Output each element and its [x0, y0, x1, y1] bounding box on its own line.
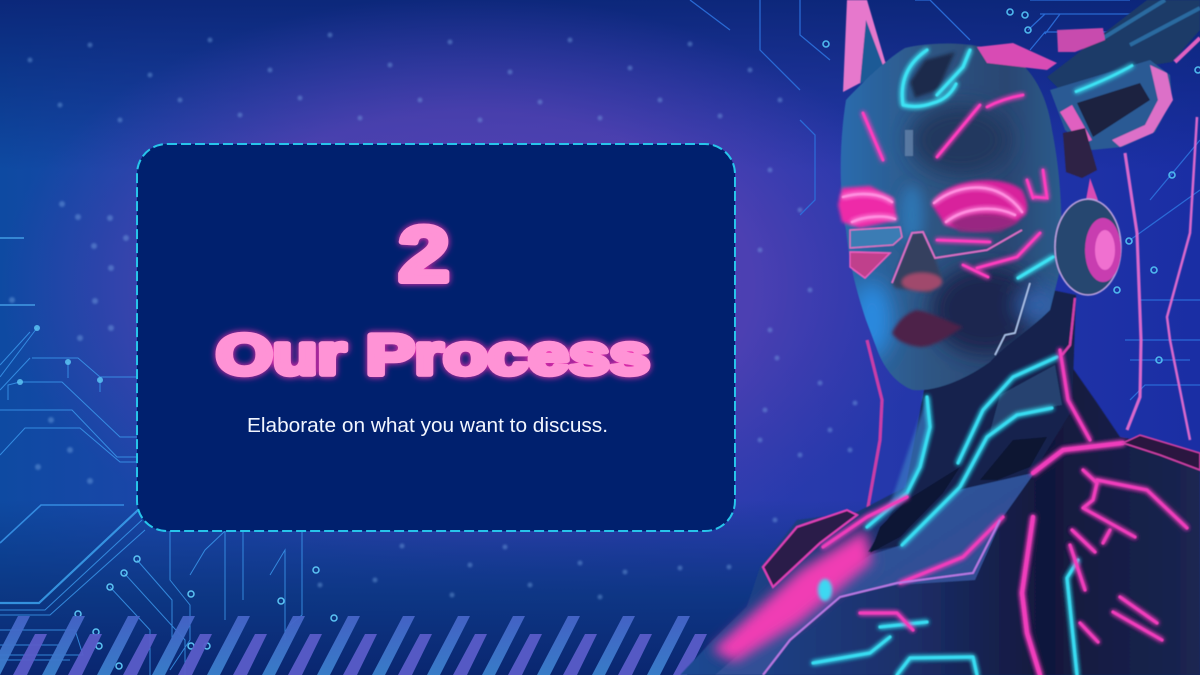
left shoulder cap [763, 510, 857, 587]
left eye band [838, 186, 897, 228]
glasses outline [892, 230, 1022, 283]
right eyelid hollow [950, 214, 1018, 232]
shoulder pink light [712, 530, 872, 662]
lips [892, 310, 963, 347]
bottom diagonal stripes [0, 616, 707, 675]
subtitle: Elaborate on what you want to discuss. [247, 415, 608, 437]
neck pit [870, 467, 960, 553]
pale cheek wire [995, 283, 1030, 355]
background dots [9, 32, 858, 600]
circuit nodes: upper right [823, 9, 1200, 433]
lower right cheek [1015, 285, 1065, 325]
headphone [1055, 178, 1121, 295]
neck sheen [890, 397, 930, 505]
neck edge pink [1062, 298, 1075, 355]
circuit nodes: left side [17, 325, 337, 669]
cyan ear line [1075, 65, 1133, 92]
cheek triangle [850, 252, 890, 278]
cyan shoulder glint [818, 579, 832, 601]
neon eye lines [843, 188, 1022, 222]
right horn [1047, 0, 1200, 100]
nose [892, 232, 943, 293]
head [838, 44, 1065, 390]
cyborg figure [680, 0, 1200, 675]
body pink neon lines [823, 350, 1187, 675]
neck and body cyan neon lines [813, 357, 1078, 675]
cyan neon forehead lines [902, 50, 1053, 278]
torso [680, 350, 1200, 675]
collar pit [980, 437, 1047, 480]
upper chest [715, 470, 1035, 675]
collar plate [990, 365, 1062, 432]
cheek highlight [852, 282, 892, 358]
face shadow [930, 265, 1040, 355]
left temple light [900, 185, 924, 245]
pink neon face lines [863, 95, 1047, 277]
head crown plate [977, 43, 1057, 70]
panel card with dashed border [137, 144, 735, 531]
forehead slot [905, 130, 913, 156]
right eye band [932, 180, 1027, 231]
section number: 2 [398, 210, 450, 298]
purple chest contour [763, 520, 1000, 675]
forehead shadow [910, 105, 1010, 175]
central panel [137, 144, 735, 531]
neck [868, 290, 1076, 552]
loose cables [867, 117, 1197, 507]
ear module [1050, 60, 1173, 178]
circuit lines: upper right [690, 0, 1200, 400]
forehead dark patch [910, 52, 955, 98]
circuit lines: left side [0, 238, 302, 675]
left horn [843, 0, 887, 92]
left eye lens [850, 227, 902, 248]
right pauldron [1123, 435, 1200, 470]
heading: Our Process [216, 323, 650, 387]
